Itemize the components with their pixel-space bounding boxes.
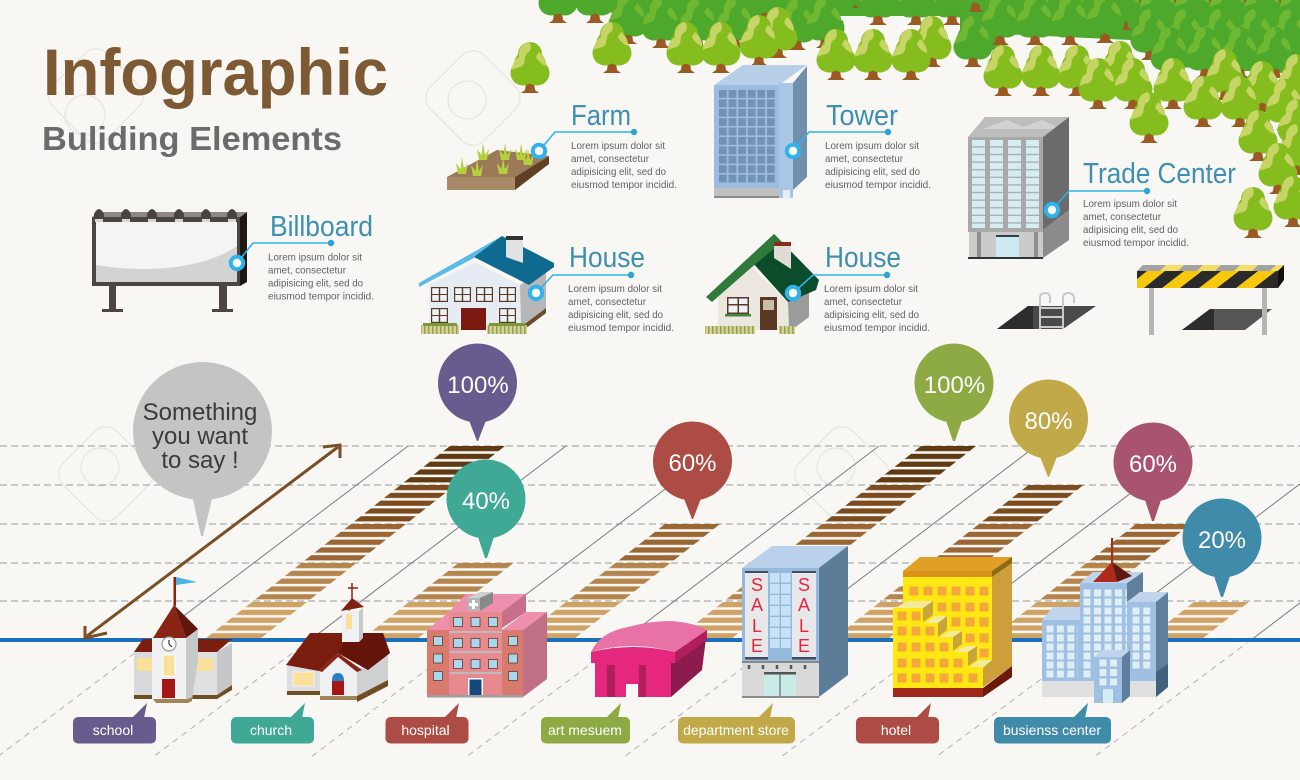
label: school	[73, 703, 156, 744]
text: farm description: eiusmod tempor incidid.	[571, 179, 677, 191]
bubble: 40% teal	[446, 460, 526, 558]
text: house two description: adipisicing elit, sed do	[824, 309, 919, 321]
text: farm description	[571, 140, 677, 191]
callout: house one	[530, 272, 634, 299]
bubble: 60% red: 60%	[668, 450, 717, 477]
label: hotel: hotel	[881, 722, 911, 738]
icon: road barrier	[1137, 265, 1284, 335]
text: tower description	[825, 140, 931, 191]
label: church: church	[250, 722, 292, 738]
bubble: 80% gold	[1009, 380, 1088, 477]
text: house one description: eiusmod tempor incidid.	[568, 322, 674, 334]
label: art mesuem: art mesuem	[548, 722, 622, 738]
text: house one description: amet, consectetur	[568, 296, 646, 308]
icon: billboard	[92, 209, 247, 312]
icon: trade center	[968, 117, 1069, 259]
text: house one description	[568, 283, 674, 334]
label: house two title: House	[825, 242, 901, 274]
text: billboard description: eiusmod tempor incidid.	[268, 290, 374, 302]
bar chart: department store 80%	[834, 485, 1084, 638]
label: school: school	[93, 722, 133, 738]
text: house two description: Lorem ipsum dolor sit	[824, 283, 918, 295]
callout: tower	[787, 129, 891, 157]
text: tower description: amet, consectetur	[825, 153, 903, 165]
bar chart: church 40%	[363, 563, 513, 638]
callout: trade center	[1046, 188, 1150, 216]
ground line	[0, 638, 1300, 643]
text: tower description: adipisicing elit, sed do	[825, 166, 920, 178]
text: farm description: adipisicing elit, sed do	[571, 166, 666, 178]
text: trade center description: amet, consectetur	[1083, 211, 1161, 223]
bubble: 60% rose	[1114, 422, 1192, 521]
bubble: 20% blue	[1182, 498, 1262, 597]
label: trade center title: Trade Center	[1083, 158, 1236, 190]
subtitle: Buliding Elements	[42, 120, 342, 157]
text: farm description: amet, consectetur	[571, 153, 649, 165]
bar chart: art museum 100%	[677, 446, 976, 638]
text: tower description: Lorem ipsum dolor sit	[825, 140, 919, 152]
label: tower title: Tower	[826, 100, 898, 132]
label: busienss center	[994, 703, 1111, 744]
label: house one title: House	[569, 242, 645, 274]
bar chart: business center 20%	[1148, 602, 1249, 638]
text: trade center description	[1083, 198, 1189, 249]
trees: forest	[538, 0, 1300, 238]
label: busienss center: busienss center	[1003, 722, 1101, 738]
text: tower description: eiusmod tempor incidid.	[825, 179, 931, 191]
icon: green roof house	[705, 234, 819, 334]
callout: house two	[787, 272, 890, 299]
text: house one description: adipisicing elit, sed do	[568, 309, 663, 321]
building: hotel	[893, 557, 1012, 697]
text: sale signs: S	[751, 575, 763, 595]
text: sale signs: E	[798, 636, 810, 656]
callout bubble: something you want to say: you want	[152, 423, 248, 450]
building: school	[134, 577, 232, 703]
text: trade center description: adipisicing elit, sed do	[1083, 224, 1178, 236]
arrow: scale double arrow	[85, 445, 340, 638]
building: hospital	[427, 592, 547, 698]
text: billboard description	[268, 252, 374, 302]
bubble: 100% purple: 100%	[447, 372, 509, 399]
icon: tower	[714, 65, 807, 199]
bar chart: hotel 60%	[991, 524, 1191, 638]
text: billboard description: adipisicing elit, sed do	[268, 278, 363, 290]
text: farm description: Lorem ipsum dolor sit	[571, 140, 665, 152]
icon: farm	[447, 143, 549, 190]
label: art mesuem	[541, 703, 630, 744]
building: art museum	[591, 621, 707, 697]
text: sale signs: A	[798, 595, 810, 615]
building: department store	[742, 546, 848, 698]
label: church	[231, 703, 314, 744]
building: church	[286, 583, 390, 702]
text: trade center description: Lorem ipsum dolor sit	[1083, 198, 1177, 210]
bubble: 100% green	[914, 344, 994, 441]
title: Infographic	[43, 35, 388, 109]
bubble: 100% green: 100%	[924, 372, 985, 399]
icon: swimming pool	[997, 293, 1096, 329]
text: trade center description: eiusmod tempor incidid.	[1083, 237, 1189, 249]
label: department store	[678, 703, 795, 744]
text: sale signs: L	[752, 616, 762, 636]
callout bubble: something you want to say: to say !	[161, 447, 239, 474]
text: sale signs: E	[751, 636, 763, 656]
label: billboard title: Billboard	[270, 211, 373, 243]
bubble: 80% gold: 80%	[1024, 408, 1073, 435]
bubble: 20% blue: 20%	[1198, 527, 1246, 554]
text: billboard description: Lorem ipsum dolor sit	[268, 252, 362, 264]
text: house two description	[824, 283, 930, 334]
label: farm title: Farm	[571, 100, 631, 132]
text: sale signs	[751, 575, 810, 656]
callout: farm	[533, 129, 637, 157]
label: department store: department store	[683, 722, 789, 738]
bubble: 60% red	[653, 422, 732, 519]
callout: billboard	[231, 240, 334, 269]
icon: single tree	[510, 42, 550, 93]
bubble: 40% teal: 40%	[462, 488, 510, 515]
text: sale signs: S	[798, 575, 810, 595]
label: hotel	[856, 703, 939, 744]
text: house one description: Lorem ipsum dolor sit	[568, 283, 662, 295]
text: sale signs: L	[799, 616, 809, 636]
bar chart: school 100%	[206, 446, 505, 638]
callout bubble: something you want to say: Something	[143, 399, 257, 426]
callout bubble: something you want to say	[133, 362, 272, 536]
label: hospital: hospital	[401, 722, 450, 738]
bubble: 60% rose: 60%	[1129, 451, 1177, 478]
icon: blue roof house	[419, 236, 554, 334]
text: sale signs: A	[751, 595, 763, 615]
label: hospital	[386, 703, 468, 744]
text: house two description: amet, consectetur	[824, 296, 902, 308]
building: business center	[1042, 538, 1168, 703]
text: billboard description: amet, consectetur	[268, 264, 346, 276]
text: house two description: eiusmod tempor incidid.	[824, 322, 930, 334]
bubble: 100% purple	[438, 344, 517, 441]
bar chart: hospital 60%	[520, 524, 720, 638]
